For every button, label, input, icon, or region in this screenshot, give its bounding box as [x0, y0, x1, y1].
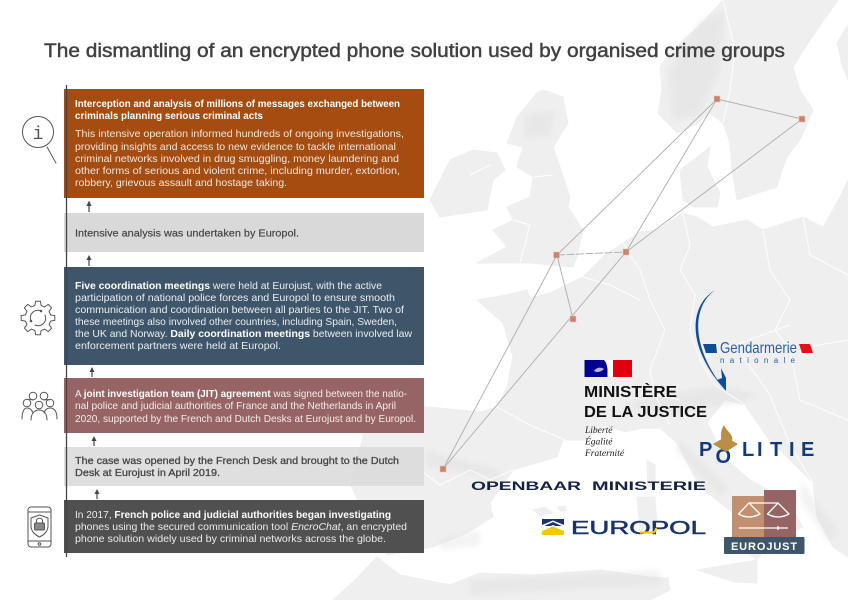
logo: Ministère de la Justice: Fraternité	[584, 449, 625, 459]
icon: gear	[21, 301, 55, 335]
title: The dismantling of an encrypted phone solution used by organised crime groups	[44, 41, 785, 62]
logo: Openbaar Ministerie: MINISTERIE	[592, 481, 707, 493]
logo: Europol	[542, 518, 706, 538]
logo: Gendarmerie nationale: nationale	[720, 356, 796, 365]
logo: Politie: POLITIE	[699, 439, 814, 468]
logo: Ministère de la Justice: MINISTÈRE	[584, 382, 677, 401]
logo: Ministère de la Justice: Liberté	[584, 426, 613, 436]
panel: coordination meetings: communication and coordination between all parties to the JIT. Two of	[75, 305, 404, 316]
icon: secured phone	[28, 507, 51, 547]
logo: Eurojust	[724, 490, 804, 554]
logo: Ministère de la Justice: DE LA JUSTICE	[584, 404, 707, 421]
panel: interception and analysis	[64, 89, 424, 198]
panel: coordination meetings: the UK and Norway. Daily coordination meetings between involved law	[75, 329, 412, 340]
panel: intensive analysis	[64, 213, 424, 252]
city nodes	[440, 96, 805, 472]
icon: magnifier with information sign: i	[33, 125, 43, 145]
panel: coordination meetings: enforcement partners were held at Europol.	[75, 341, 281, 352]
logo: Ministère de la Justice: Égalité	[584, 436, 613, 448]
panel: 2017 investigation: phones using the secured communication tool EncroChat, an encrypted	[75, 522, 407, 533]
panel: joint investigation team agreement: nal police and judicial authorities of France and the Netherlands in April	[75, 401, 396, 412]
logo: Politie	[699, 425, 814, 468]
panel: coordination meetings: Five coordination meetings were held at Eurojust, with the active	[75, 281, 382, 292]
logo: Openbaar Ministerie	[471, 481, 707, 493]
panel: joint investigation team agreement: 2020, supported by the French and Dutch Desks at Eurojust and by Europol.	[75, 414, 416, 425]
panel: interception and analysis: This intensive operation informed hundreds of ongoing investigations,	[75, 129, 404, 140]
panel: interception and analysis: Interception and analysis of millions of messages exchanged between	[75, 99, 400, 110]
panel: case opened	[64, 447, 424, 486]
network links between city nodes	[443, 99, 802, 469]
panel: 2017 investigation: In 2017, French police and judicial authorities began investigating	[75, 510, 391, 521]
panel: interception and analysis: providing insights and access to new evidence to tackle international	[75, 142, 396, 153]
panel: coordination meetings	[64, 267, 424, 365]
logo: Ministère de la Justice	[584, 360, 707, 459]
panel: case opened: Desk at Eurojust in April 2019.	[75, 468, 220, 479]
panel: coordination meetings: participation of national police forces and Europol to ensure smooth	[75, 293, 395, 304]
icon: group of people	[22, 392, 57, 420]
panel: interception and analysis: criminals planning serious criminal acts	[75, 111, 263, 122]
panel: 2017 investigation: phone solution widely used by criminal networks across the globe.	[75, 534, 386, 545]
map of Europe	[333, 0, 848, 600]
panel: case opened: The case was opened by the French Desk and brought to the Dutch	[75, 456, 399, 467]
panel: joint investigation team agreement	[64, 378, 424, 433]
panel: 2017 investigation	[64, 500, 424, 553]
icon: magnifier with information sign	[22, 116, 56, 163]
panel: interception and analysis: robbery, grievous assault and hostage taking.	[75, 178, 287, 189]
logo: Eurojust: EUROJUST	[731, 541, 798, 553]
panel: intensive analysis: Intensive analysis was undertaken by Europol.	[75, 228, 299, 240]
logo: Europol: EUROPOL	[571, 518, 706, 538]
panel: coordination meetings: these meetings also involved other countries, including Spain, Sweden,	[75, 317, 397, 328]
logo: Gendarmerie nationale: Gendarmerie	[720, 340, 797, 357]
logo: Gendarmerie nationale	[696, 290, 813, 391]
panel: interception and analysis: other forms of serious and violent crime, including murder, extortion,	[75, 166, 400, 177]
timeline axis	[66, 85, 68, 557]
panel: interception and analysis: criminal networks involved in drug smuggling, money laundering and	[75, 154, 399, 165]
logo: Openbaar Ministerie: OPENBAAR	[471, 481, 582, 493]
panel: joint investigation team agreement: A joint investigation team (JIT) agreement was signed between the natio-	[75, 389, 407, 400]
arrows between panels	[86, 200, 100, 499]
